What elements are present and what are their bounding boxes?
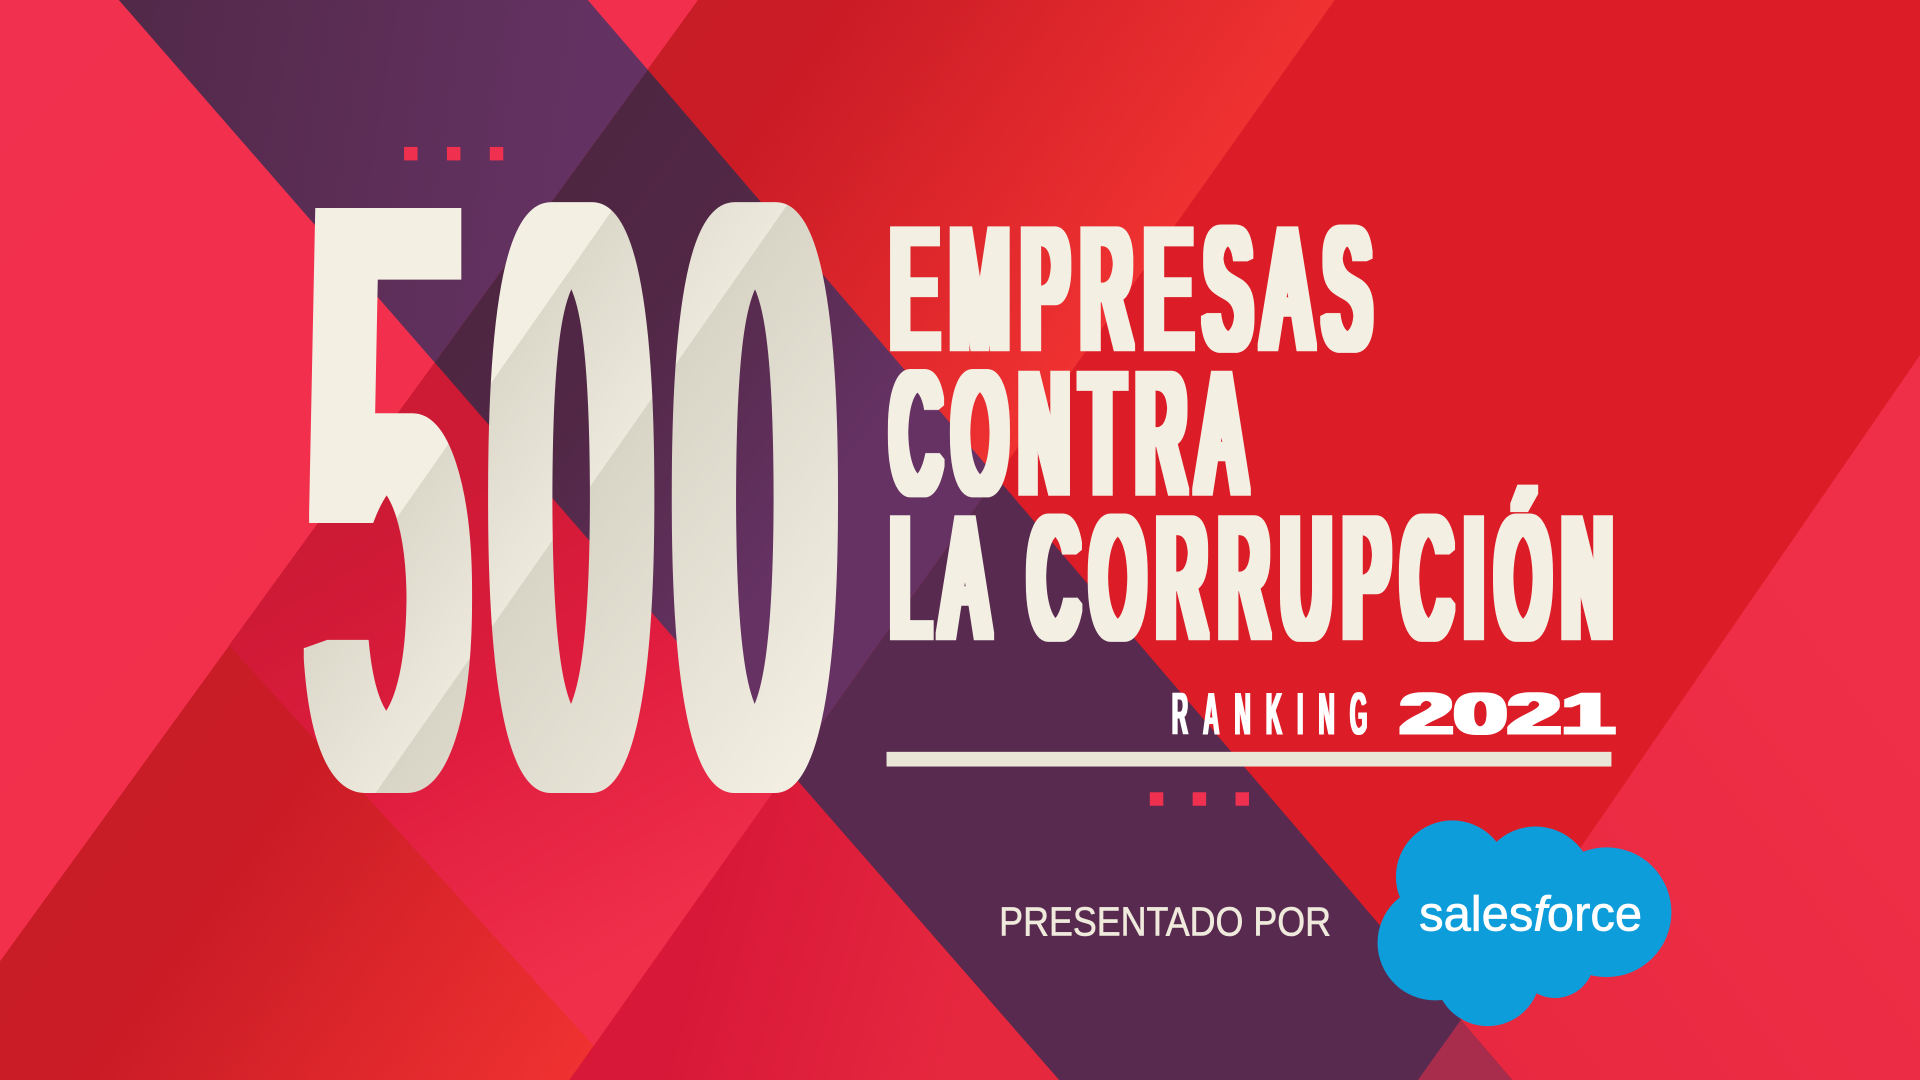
label: year 2021: 2021 [1400, 682, 1615, 746]
salesforce logo [1378, 820, 1671, 1026]
big number 500 [294, 190, 851, 802]
title: empresas contra la corrupción [891, 194, 1625, 674]
divider bar [887, 752, 1611, 767]
infographic canvas: RANKING [1172, 681, 1382, 748]
logo wordmark: salesforce [1419, 888, 1642, 942]
decorative dots: top [404, 147, 503, 160]
decorative dots: bottom [1150, 792, 1249, 806]
icon: salesforce cloud [1378, 820, 1671, 1026]
presented by label: PRESENTADO POR [999, 899, 1331, 945]
title: empresas contra la corrupción: CONTRA [891, 338, 1258, 529]
